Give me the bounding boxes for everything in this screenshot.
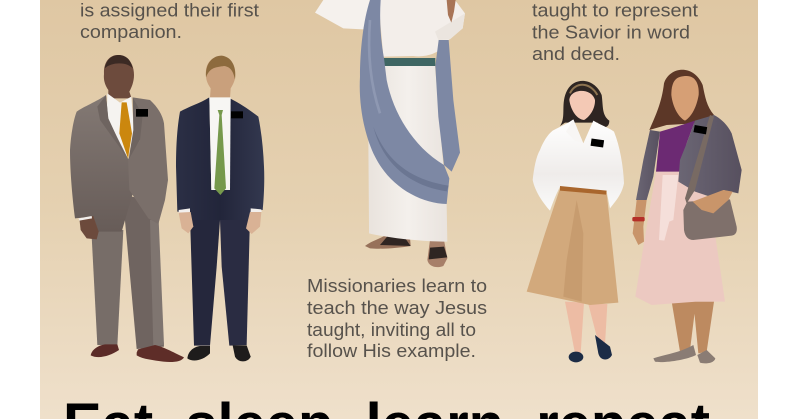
text: taught to represent the Savior: taught to represent (532, 0, 698, 20)
text: Missionaries learn to teach: Missionaries learn to (307, 275, 487, 296)
figure: elder in grey suit (70, 55, 184, 362)
figure: sister in white blouse and tan skirt (527, 81, 624, 362)
figure: sister in grey jacket with shoulder bag and pink skirt (632, 70, 742, 363)
text: Missionaries learn to teach (307, 275, 487, 361)
text: first companion (80, 0, 259, 42)
text: Missionaries learn to teach: follow His example. (307, 340, 476, 361)
text: Missionaries learn to teach: taught, inviting all to (307, 319, 476, 340)
text: taught to represent the Savior: the Savior in word (532, 22, 690, 42)
text: first companion: companion. (80, 21, 182, 42)
text: taught to represent the Savior (532, 0, 698, 64)
text: first companion: is assigned their first (80, 0, 259, 20)
text: taught to represent the Savior: and deed. (532, 43, 620, 64)
figure: Jesus in white robe and blue sash (315, 0, 465, 267)
text: Missionaries learn to teach: teach the way Jesus (307, 297, 487, 318)
figure: elder in navy suit (176, 56, 264, 361)
